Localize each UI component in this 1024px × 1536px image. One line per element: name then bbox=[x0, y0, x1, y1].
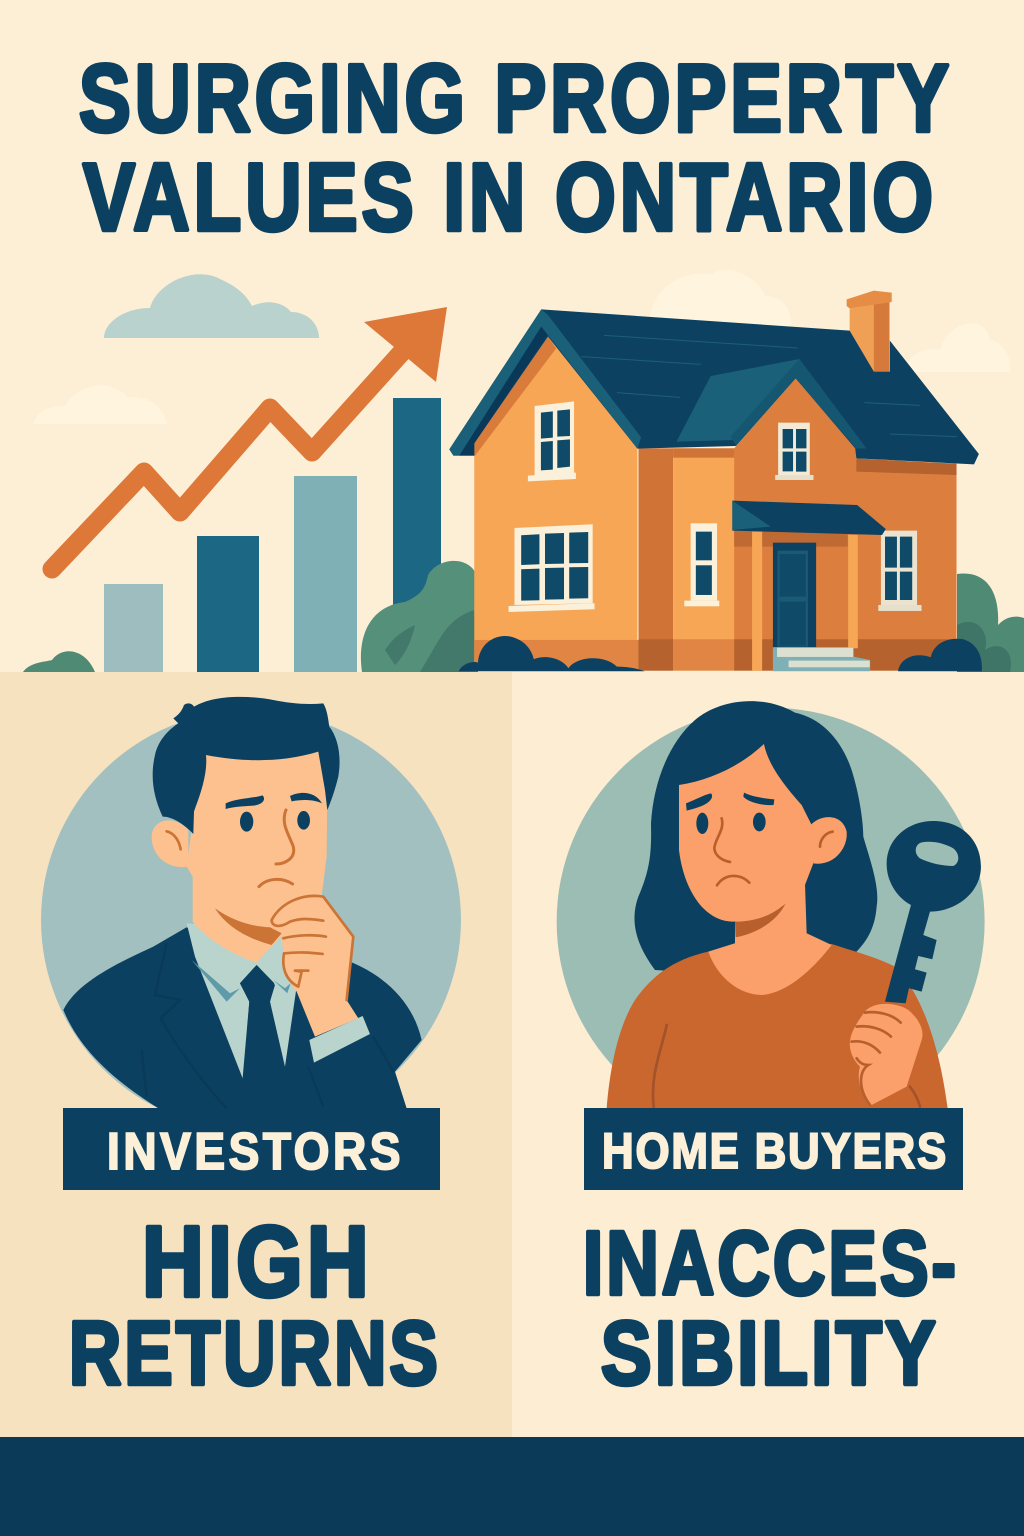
nose and mouth bbox=[276, 810, 294, 864]
suit bbox=[63, 927, 422, 1108]
headline: high returns bbox=[69, 1206, 441, 1404]
jaw shadow bbox=[215, 908, 282, 945]
hair bbox=[634, 701, 877, 977]
label: investors bbox=[63, 1108, 440, 1190]
eyebrows bbox=[226, 795, 264, 809]
window upper left bbox=[528, 401, 576, 481]
eyes bbox=[696, 813, 708, 834]
nose and mouth bbox=[714, 818, 730, 862]
rising arrow bbox=[52, 307, 447, 569]
panel: investors bbox=[0, 672, 512, 1438]
house walls bbox=[474, 337, 637, 671]
ear bbox=[152, 820, 188, 867]
neck bbox=[708, 883, 832, 995]
tie bbox=[240, 965, 287, 1108]
house bbox=[449, 291, 982, 671]
hand bbox=[850, 1004, 922, 1105]
porch columns and door bbox=[752, 532, 858, 671]
main roof bbox=[449, 309, 979, 464]
headline: high returns: HIGH bbox=[142, 1206, 373, 1318]
headline: high returns: RETURNS bbox=[69, 1304, 441, 1404]
label: investors: INVESTORS bbox=[107, 1123, 404, 1181]
shirt bbox=[187, 923, 297, 1080]
neck and face bbox=[187, 752, 327, 963]
window lower left bbox=[509, 524, 595, 612]
label: home buyers: HOME BUYERS bbox=[602, 1123, 948, 1179]
chimney bbox=[850, 302, 889, 372]
investor portrait bbox=[41, 697, 461, 1130]
hand bbox=[272, 896, 358, 1037]
hair bbox=[153, 697, 340, 834]
icon: key bbox=[885, 821, 981, 1003]
headline: inaccessibility: SIBILITY bbox=[601, 1304, 939, 1404]
home buyer portrait bbox=[557, 701, 985, 1136]
label: home buyers bbox=[584, 1108, 963, 1190]
gable window bbox=[775, 423, 814, 480]
porch roof bbox=[732, 501, 886, 535]
right window bbox=[878, 531, 922, 611]
title bbox=[79, 45, 953, 251]
footer band bbox=[0, 1437, 1024, 1536]
hero scene: clouds bbox=[33, 270, 1010, 424]
bar chart bbox=[104, 398, 441, 672]
headline: inaccessibility bbox=[583, 1214, 959, 1404]
sweater bbox=[607, 944, 948, 1108]
steps bbox=[773, 647, 870, 671]
face bbox=[679, 744, 813, 922]
sleeve crease bbox=[653, 1025, 920, 1107]
bushes behind house bbox=[361, 561, 1024, 672]
cuff bbox=[309, 1016, 370, 1063]
panel: home buyers bbox=[512, 672, 1024, 1438]
ear bbox=[810, 817, 847, 864]
narrow window bbox=[684, 523, 719, 606]
front shrubs bbox=[459, 636, 982, 671]
eyebrows bbox=[686, 793, 712, 811]
eyes bbox=[240, 812, 253, 832]
small bush left bbox=[23, 651, 95, 672]
